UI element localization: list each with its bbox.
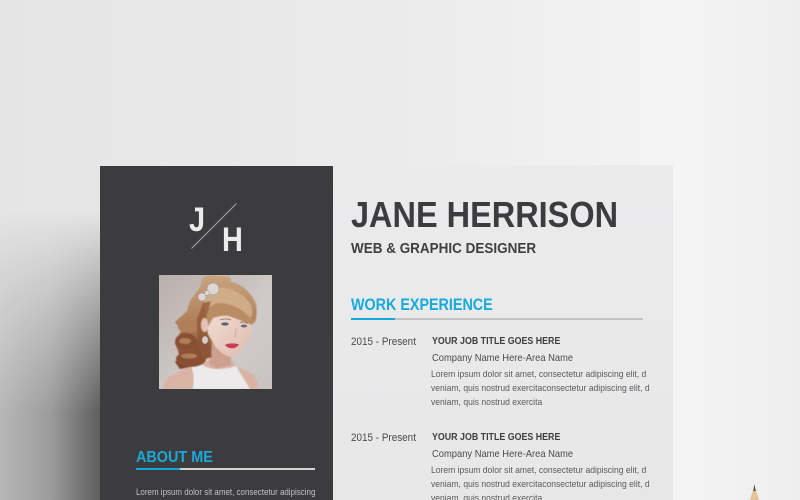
hair fringe: [207, 306, 255, 327]
heading: work experience: WORK EXPERIENCE: [351, 296, 493, 314]
job title 2: YOUR JOB TITLE GOES HERE: [432, 432, 560, 443]
heading: about me: ABOUT ME: [136, 449, 213, 466]
date 2: 2015 - Present: [351, 432, 416, 444]
letter H: H: [222, 221, 243, 259]
hair mass: [175, 276, 257, 369]
name heading: JANE HERRISON: [351, 194, 618, 235]
eyes: [220, 319, 248, 324]
shoulders: [163, 359, 258, 389]
monogram logo: [189, 201, 243, 259]
description 1: veniam, quis nostrud exercitaconsectetur adipiscing elit, d: [431, 382, 650, 393]
icon: pencil tip: [750, 484, 759, 500]
description 1: [431, 368, 650, 407]
about me rule: [136, 468, 315, 470]
description 2: [431, 464, 650, 500]
monogram slash: [191, 203, 237, 249]
portrait photo: [159, 275, 272, 389]
date 1: 2015 - Present: [351, 336, 416, 348]
hair highlight: [204, 288, 252, 319]
company 2: Company Name Here-Area Name: [432, 449, 573, 460]
neck: [209, 337, 231, 369]
about me text: Lorem ipsum dolor sit amet, consectetur adipiscing: [136, 486, 315, 497]
letter J: J: [189, 201, 205, 239]
work experience rule: [351, 318, 643, 320]
job title 1: YOUR JOB TITLE GOES HERE: [432, 336, 560, 347]
ear: [201, 318, 208, 332]
panel: resume sheet right: [333, 165, 673, 500]
description 1: Lorem ipsum dolor sit amet, consectetur adipiscing elit, d: [431, 368, 646, 379]
panel: dark sidebar: [100, 166, 333, 500]
description 2: Lorem ipsum dolor sit amet, consectetur adipiscing elit, d: [431, 464, 646, 475]
nose shadow: [234, 328, 237, 338]
face: [206, 315, 251, 357]
hair curls: [175, 333, 208, 367]
subtitle: WEB & GRAPHIC DESIGNER: [351, 241, 536, 257]
description 1: veniam, quis nostrud exercita: [431, 396, 542, 407]
earring: [202, 336, 208, 344]
dress: [190, 361, 250, 389]
lips: [225, 343, 239, 348]
paper shadow: [0, 210, 101, 500]
tiara: [198, 283, 219, 301]
hair shadow: [197, 301, 212, 359]
company 1: Company Name Here-Area Name: [432, 353, 573, 364]
description 2: veniam, quis nostrud exercitaconsectetur adipiscing elit, d: [431, 478, 650, 489]
